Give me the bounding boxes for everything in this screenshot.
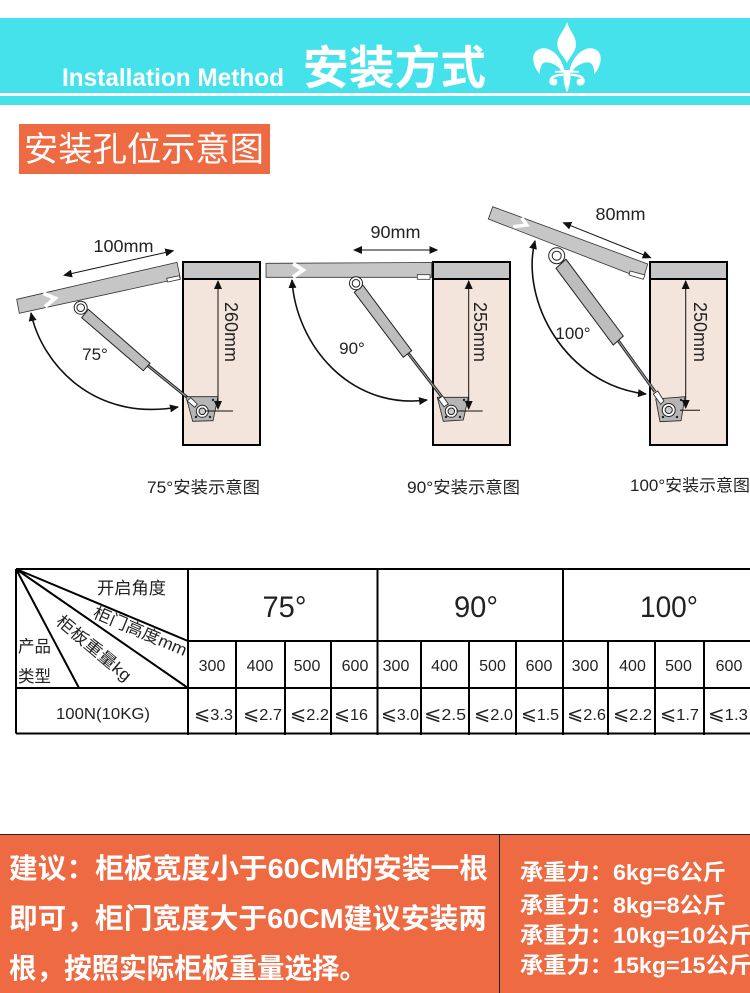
angle headers: 75° <box>262 591 306 624</box>
arrow: height dimension <box>457 281 483 411</box>
corner header labels: 类型 <box>18 667 51 686</box>
header diagonals <box>16 569 188 688</box>
door height row: 400 <box>431 658 458 675</box>
weight values row: ⩽1.7 <box>660 704 699 725</box>
caption: 90°安装示意图 <box>407 478 520 497</box>
door height row: 600 <box>526 658 552 675</box>
door height row: 500 <box>479 658 506 675</box>
label: 100 degrees: 100° <box>555 324 591 343</box>
load capacity list: 承重力：6kg=6公斤 <box>520 860 726 885</box>
English heading: Installation Method <box>62 64 284 92</box>
table grid <box>16 569 750 735</box>
cabinet <box>183 262 260 445</box>
arrow: opening arc <box>532 241 646 394</box>
corner header labels <box>18 579 190 686</box>
recommendation text: 根，按照实际柜板重量选择。 <box>9 953 367 984</box>
door height row: 400 <box>619 658 646 675</box>
door panel <box>17 262 180 313</box>
weight values row: ⩽2.6 <box>567 704 606 725</box>
door height row: 500 <box>665 658 692 675</box>
label: 75 degrees: 75° <box>82 345 108 364</box>
mounting bracket <box>186 397 218 421</box>
load capacity list <box>520 860 750 978</box>
door panel <box>488 207 648 279</box>
load capacity list: 承重力：10kg=10公斤 <box>520 923 750 948</box>
door height row: 600 <box>716 658 742 675</box>
arrow: width dimension <box>64 251 173 275</box>
label: 90mm: 90mm <box>370 222 420 242</box>
weight values row: ⩽1.3 <box>708 704 748 725</box>
icon: fleur-de-lis <box>533 22 601 92</box>
recommendation text: 建议：柜板宽度小于60CM的安装一根 <box>9 853 488 884</box>
section heading: 安装孔位示意图: 安装孔位示意图 <box>24 131 264 169</box>
cabinet <box>650 262 727 445</box>
gas spring <box>549 248 655 392</box>
weight values row: ⩽3.3 <box>194 704 233 725</box>
load capacity list: 承重力：15kg=15公斤 <box>520 953 750 978</box>
weight values row: ⩽2.0 <box>474 704 513 725</box>
gas spring <box>74 301 188 398</box>
arrow: height dimension <box>680 281 700 410</box>
cabinet <box>433 262 510 445</box>
diagram: 75 degree installation <box>17 236 260 497</box>
100N row label: 100N(10KG) <box>56 706 150 723</box>
arrow: opening arc <box>31 313 178 409</box>
weight values row: ⩽2.7 <box>243 704 282 725</box>
gas spring <box>350 277 442 397</box>
door panel <box>266 262 432 279</box>
header banner <box>0 18 750 105</box>
angle headers <box>262 591 698 624</box>
caption: 75°安装示意图 <box>147 478 260 497</box>
door height row: 300 <box>572 658 598 675</box>
label: 80mm: 80mm <box>596 204 646 224</box>
recommendation text: 即可，柜门宽度大于60CM建议安装两 <box>9 903 487 934</box>
angle headers: 100° <box>640 591 698 624</box>
door height row: 500 <box>294 658 320 675</box>
main title: 安装方式 <box>303 42 486 94</box>
corner header labels: 产品 <box>18 637 51 656</box>
arrow: opening arc <box>292 280 427 401</box>
corner header labels: 柜板重量kg <box>52 612 135 685</box>
weight values row: ⩽3.0 <box>381 704 419 725</box>
arrow: width dimension <box>563 223 651 258</box>
mounting bracket <box>437 396 468 421</box>
door height row: 300 <box>199 658 225 675</box>
door height row: 400 <box>247 658 273 675</box>
arrow: height dimension <box>205 281 233 411</box>
weight values row: ⩽2.2 <box>613 704 652 725</box>
load capacity list: 承重力：8kg=8公斤 <box>520 893 726 918</box>
recommendation text <box>9 853 488 984</box>
door height row: 600 <box>342 658 368 675</box>
label: 90 degrees: 90° <box>339 339 365 358</box>
footer panel <box>0 834 750 993</box>
weight values row: ⩽2.2 <box>290 704 329 725</box>
weight values row: ⩽16 <box>334 704 368 725</box>
door height row: 300 <box>383 658 409 675</box>
corner header labels: 柜门高度mm <box>90 603 190 660</box>
weight values row <box>194 704 748 725</box>
diagram: 90 degree installation <box>266 222 520 497</box>
label: 100mm: 100mm <box>94 236 154 256</box>
label: 260mm: 260mm <box>221 302 241 362</box>
caption: 100°安装示意图 <box>630 476 750 495</box>
label: 255mm: 255mm <box>470 302 490 362</box>
mounting bracket <box>653 391 685 422</box>
weight values row: ⩽1.5 <box>521 704 559 725</box>
door height row <box>199 658 742 675</box>
arrow: width dimension <box>354 249 437 251</box>
weight values row: ⩽2.5 <box>424 704 466 725</box>
label: 250mm: 250mm <box>690 302 710 362</box>
angle headers: 90° <box>454 591 498 624</box>
spec table <box>16 569 750 735</box>
corner header labels: 开启角度 <box>97 579 166 598</box>
diagram: 100 degree installation <box>488 204 750 495</box>
